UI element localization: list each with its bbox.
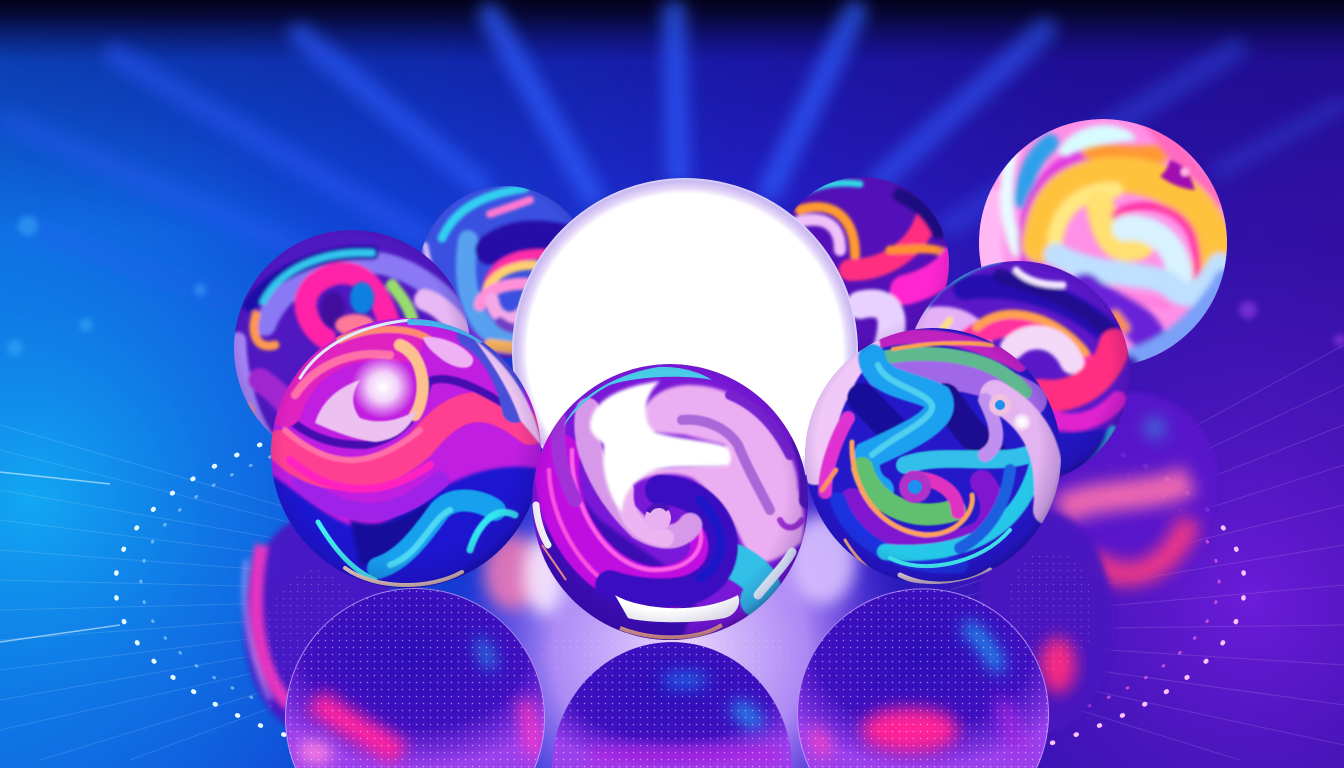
reflection: front centre marble [552,642,792,768]
marble: front right [805,328,1061,585]
marble: right [906,260,1130,485]
reflection: upper right marble [1042,392,1218,574]
marble: front centre [532,364,809,645]
faint blurred floating dots [7,216,1344,356]
marble: back right [791,177,949,351]
reflection: front right marble [797,588,1049,768]
reflection: left marble [244,513,396,737]
marble: left [234,230,469,435]
dotted floor rings [115,420,1245,760]
central glowing orb [512,178,858,524]
reflection: right marble [977,512,1113,732]
reflection: front left marble [285,588,545,768]
marble: far right [979,118,1227,367]
floor glow under central sphere [450,420,910,768]
marble: back left [422,186,572,358]
marble: front left [271,318,545,600]
light rays [10,12,1340,300]
